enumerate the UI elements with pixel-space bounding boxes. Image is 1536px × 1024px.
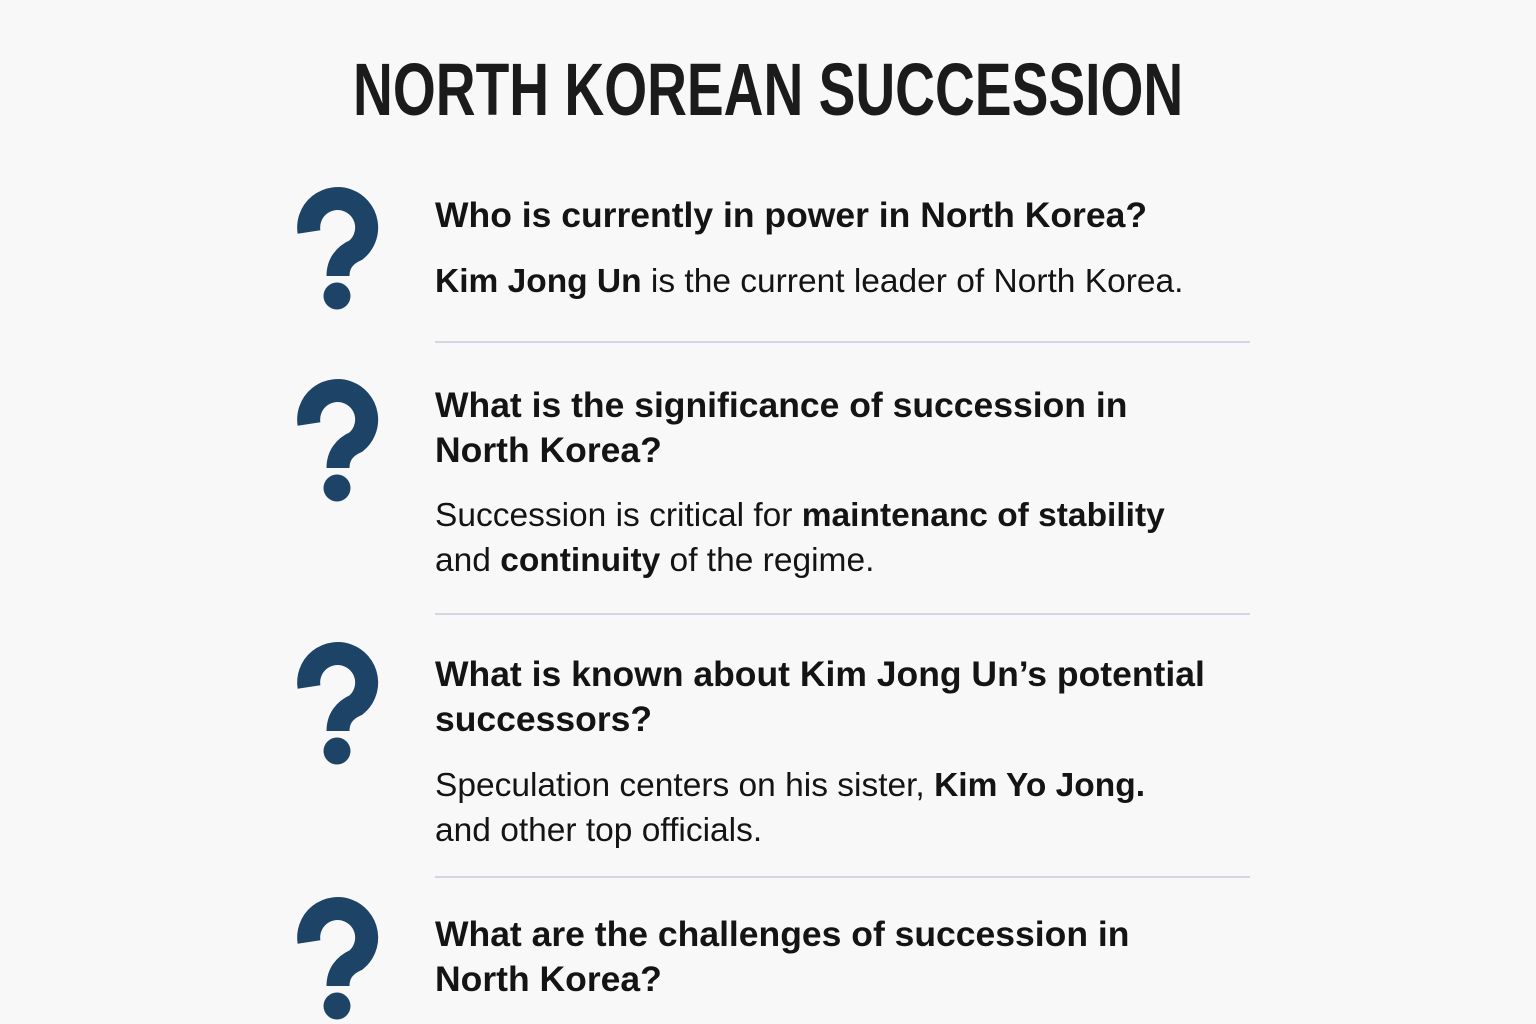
heading: question 3 [435, 654, 1205, 739]
icon: question mark 3 [297, 642, 378, 764]
icon: question mark 1 [297, 187, 378, 310]
answer 2: and continuity of the regime. [435, 542, 874, 579]
heading: question 2 [435, 385, 1127, 470]
answer 3: and other top officials. [435, 812, 762, 849]
answer 3: Speculation centers on his sister, Kim Yo Jong. [435, 767, 1145, 804]
answer 1: Kim Jong Un is the current leader of North Korea. [435, 263, 1183, 300]
title: NORTH KOREAN SUCCESSION [353, 48, 1183, 131]
heading: question 2: What is the significance of succession in [435, 385, 1127, 425]
heading: question 4: What are the challenges of succession in [435, 914, 1129, 954]
answer 2 [435, 497, 1165, 579]
heading: question 4 [435, 914, 1129, 999]
heading: question 2: North Korea? [435, 430, 662, 470]
heading: question 3: successors? [435, 699, 652, 739]
heading: question 3: What is known about Kim Jong Un’s potential [435, 654, 1205, 694]
answer 2: Succession is critical for maintenanc of stability [435, 497, 1165, 534]
answer 3 [435, 767, 1145, 849]
heading: question 1: Who is currently in power in North Korea? [435, 195, 1147, 235]
icon: question mark 2 [297, 379, 378, 502]
icon: question mark 4 [297, 897, 378, 1020]
heading: question 4: North Korea? [435, 959, 662, 999]
